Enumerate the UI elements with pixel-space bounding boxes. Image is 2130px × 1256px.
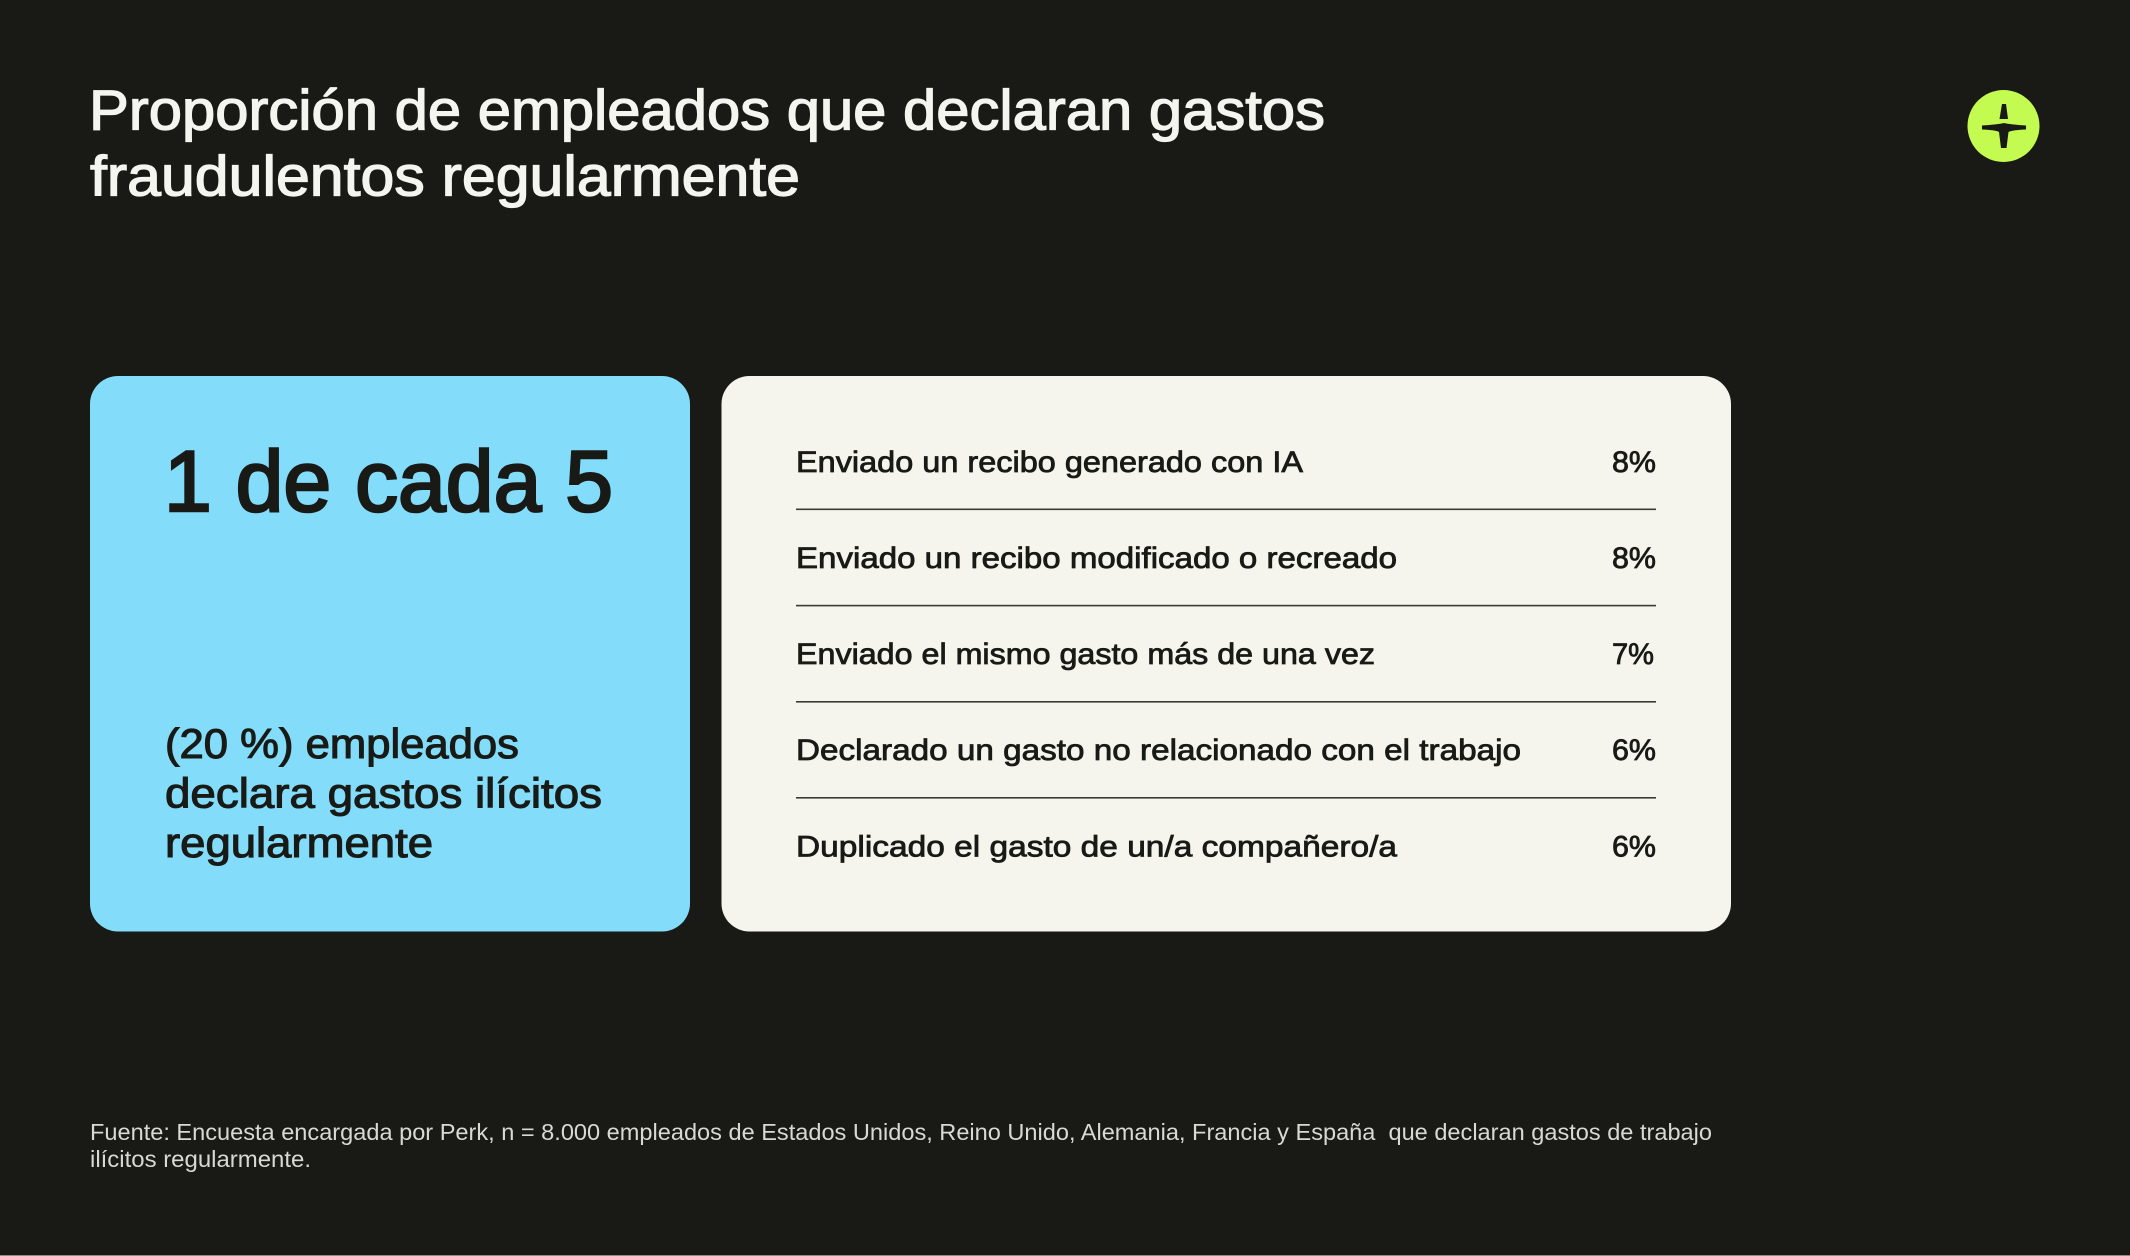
dividers: [796, 508, 1656, 799]
row 4: 6%: [1612, 734, 1656, 767]
row 2: Enviado un recibo modificado o recreado: [796, 542, 1397, 575]
stat description: regularmente: [165, 819, 433, 866]
stat description: declara gastos ilícitos: [165, 770, 602, 816]
title: fraudulentos regularmente: [90, 144, 800, 208]
title: [89, 78, 1325, 208]
row 5: [796, 830, 1656, 864]
row 3: [796, 638, 1654, 671]
row 2: 8%: [1612, 542, 1656, 575]
row 3: Enviado el mismo gasto más de una vez: [796, 638, 1375, 671]
row 3: 7%: [1612, 638, 1654, 671]
source footnote: ilícitos regularmente.: [90, 1146, 311, 1172]
row 1: Enviado un recibo generado con IA: [796, 446, 1303, 479]
stat description: (20 %) empleados: [165, 720, 519, 767]
row 4: Declarado un gasto no relacionado con el trabajo: [796, 734, 1521, 767]
panel: fraud behaviours list: [722, 376, 1731, 932]
row 2: [796, 542, 1656, 575]
source footnote: Fuente: Encuesta encargada por Perk, n = 8.000 empleados de Estados Unidos, Reino Unido, Alemania, Francia y España que declaran gastos de trabajo: [90, 1119, 1712, 1145]
source footnote: [90, 1119, 1712, 1172]
icon: green plus badge: [1968, 90, 2040, 162]
row 1: 8%: [1612, 446, 1656, 479]
title: Proporción de empleados que declaran gastos: [89, 78, 1325, 142]
row 1: [796, 446, 1656, 479]
row 5: 6%: [1612, 830, 1656, 864]
panel: highlight stat: [90, 376, 690, 932]
stat description: [165, 720, 602, 866]
row 5: Duplicado el gasto de un/a compañero/a: [796, 830, 1397, 864]
big stat: 1 de cada 5: 1 de cada 5: [164, 434, 613, 530]
